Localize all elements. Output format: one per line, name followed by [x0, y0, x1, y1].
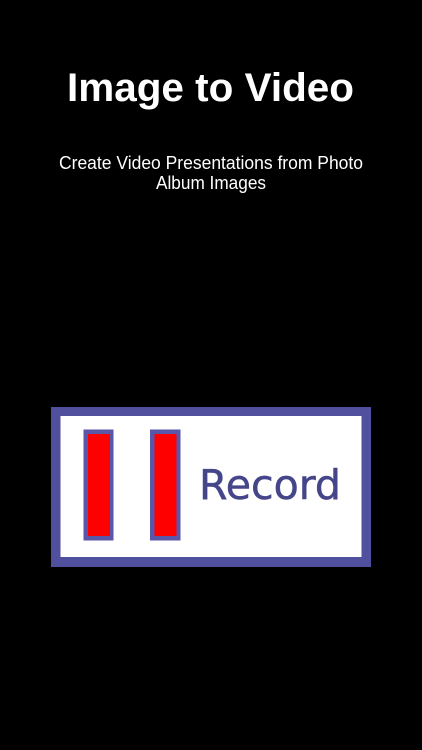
icon: pause bars	[84, 430, 180, 540]
record label: Record	[199, 461, 341, 509]
subtitle	[59, 153, 363, 193]
subtitle: Album Images	[156, 173, 266, 193]
subtitle: Create Video Presentations from Photo	[59, 153, 363, 173]
panel: record button	[51, 407, 371, 567]
title: Image to Video	[67, 66, 354, 110]
